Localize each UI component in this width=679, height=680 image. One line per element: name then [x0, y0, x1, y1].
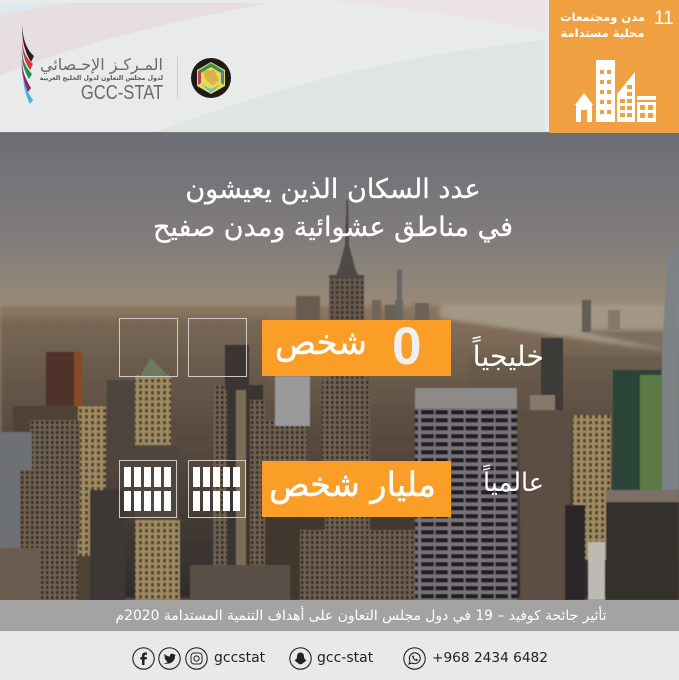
city skyline photo background — [0, 133, 679, 600]
SDG number: 11 — [654, 8, 674, 29]
value number: 0 — [392, 317, 421, 376]
SDG title — [560, 10, 645, 40]
icon box 2: ten bars — [188, 460, 246, 518]
panel: SDG 11 badge — [549, 0, 679, 133]
row: World — [119, 460, 544, 518]
left buildings — [46, 352, 82, 406]
empty icon box 2 — [188, 318, 247, 377]
handle: gccstat: gccstat — [214, 650, 265, 666]
icon: facebook — [132, 647, 155, 670]
empty icon box 1 — [119, 318, 178, 377]
center towers — [213, 385, 263, 600]
logo arabic name: المـركـز الإحـصائي — [40, 55, 163, 74]
heading: عدد السكان الذين يعيشون — [185, 174, 481, 205]
label: World: عالمياً — [483, 468, 544, 498]
footer — [0, 631, 679, 680]
right buildings — [541, 338, 563, 443]
caption bar — [0, 600, 679, 631]
distant towers — [395, 300, 403, 340]
caption text: تأثير جائحة كوفيد – 19 في دول مجلس التعاون على أهداف التنمية المستدامة 2020م — [116, 608, 606, 624]
icon: whatsapp — [403, 647, 426, 670]
logo: GCC-STAT — [22, 26, 163, 104]
value unit: شخص — [275, 323, 367, 363]
row: Gulf — [119, 317, 544, 377]
icon: ribbon mark — [22, 26, 34, 104]
Empire State Building — [329, 200, 364, 360]
header background — [0, 3, 549, 133]
icon: snapchat — [289, 647, 312, 670]
icon: instagram — [185, 647, 208, 670]
heading — [153, 174, 513, 243]
foreground office tower — [415, 388, 517, 600]
phone number: +968 2434 6482 — [432, 650, 548, 666]
emblem: GCC — [177, 57, 231, 99]
logo latin name: GCC-STAT — [81, 82, 163, 104]
value box: billion persons: مليار شخص — [269, 465, 436, 504]
logo arabic subtitle: لدول مجلس التعاون لدول الخليج العربية — [40, 75, 163, 82]
SDG title: محلية مستدامة — [561, 26, 645, 40]
icon box 1: ten bars — [119, 460, 177, 518]
SDG title: مدن ومجتمعات — [560, 10, 645, 24]
icon: city buildings — [575, 60, 656, 122]
label: Gulf: خليجياً — [473, 340, 544, 373]
heading: في مناطق عشوائية ومدن صفيح — [153, 212, 513, 243]
icon: twitter — [158, 647, 181, 670]
handle: gcc-stat: gcc-stat — [317, 650, 373, 666]
value box: 0 persons — [262, 320, 451, 376]
value box: billion persons — [262, 461, 451, 517]
